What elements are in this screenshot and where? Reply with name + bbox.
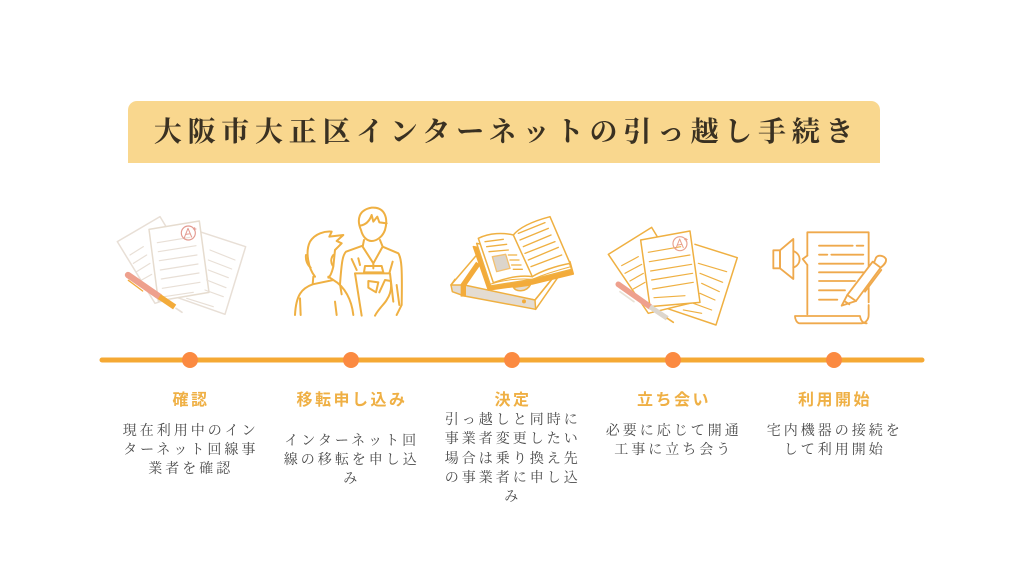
step 2: 移転申し込み: インターネット回 xyxy=(284,434,419,449)
icon: orange papers and pen xyxy=(608,227,737,325)
step 3: 決定: 場合は乗り換え先 xyxy=(445,452,581,467)
step 2: 移転申し込み xyxy=(284,391,420,487)
timeline dot 4 xyxy=(665,352,681,368)
step 4: 立ち会い xyxy=(606,391,742,458)
step 3: 決定: 事業者変更したい xyxy=(445,432,581,447)
step 1: 確認: 業者を確認 xyxy=(148,462,233,477)
icon: two people talking xyxy=(295,208,402,316)
step 3: 決定 xyxy=(445,391,581,505)
timeline dot 5 xyxy=(826,352,842,368)
timeline xyxy=(102,352,922,368)
step 4: 立ち会い: 工事に立ち会う xyxy=(614,443,733,458)
step 5: 利用開始: して利用開始 xyxy=(784,443,886,458)
step 5: 利用開始: 宅内機器の接続を xyxy=(767,424,903,439)
step 4: 立ち会い: 必要に応じて開通 xyxy=(606,424,742,439)
step 2: 移転申し込み: 移転申し込み xyxy=(296,392,408,409)
icon: open book on closed book xyxy=(451,217,573,309)
step 2: 移転申し込み: 線の移転を申し込 xyxy=(284,453,420,468)
step 1: 確認 xyxy=(123,391,259,477)
step 3: 決定: 決定 xyxy=(494,392,532,409)
timeline dot 3 xyxy=(504,352,520,368)
title: 大阪市大正区インターネットの引っ越し手続き xyxy=(154,117,859,148)
step 3: 決定: み xyxy=(504,490,521,505)
timeline dot 2 xyxy=(343,352,359,368)
step 4: 立ち会い: 立ち会い xyxy=(637,392,711,409)
icon: faded papers and pen xyxy=(117,217,246,314)
step 3: 決定: の事業者に申し込 xyxy=(445,471,581,486)
step 3: 決定: 引っ越しと同時に xyxy=(445,413,581,428)
step 1: 確認: ターネット回線事 xyxy=(123,443,258,458)
icon: document with speaker and pen xyxy=(773,232,886,323)
step 5: 利用開始 xyxy=(767,391,903,458)
step 5: 利用開始: 利用開始 xyxy=(798,392,872,409)
step 2: 移転申し込み: み xyxy=(343,472,360,487)
step 1: 確認: 確認 xyxy=(172,392,210,409)
timeline dot 1 xyxy=(182,352,198,368)
title banner xyxy=(128,101,880,163)
step 1: 確認: 現在利用中のイン xyxy=(123,424,259,439)
